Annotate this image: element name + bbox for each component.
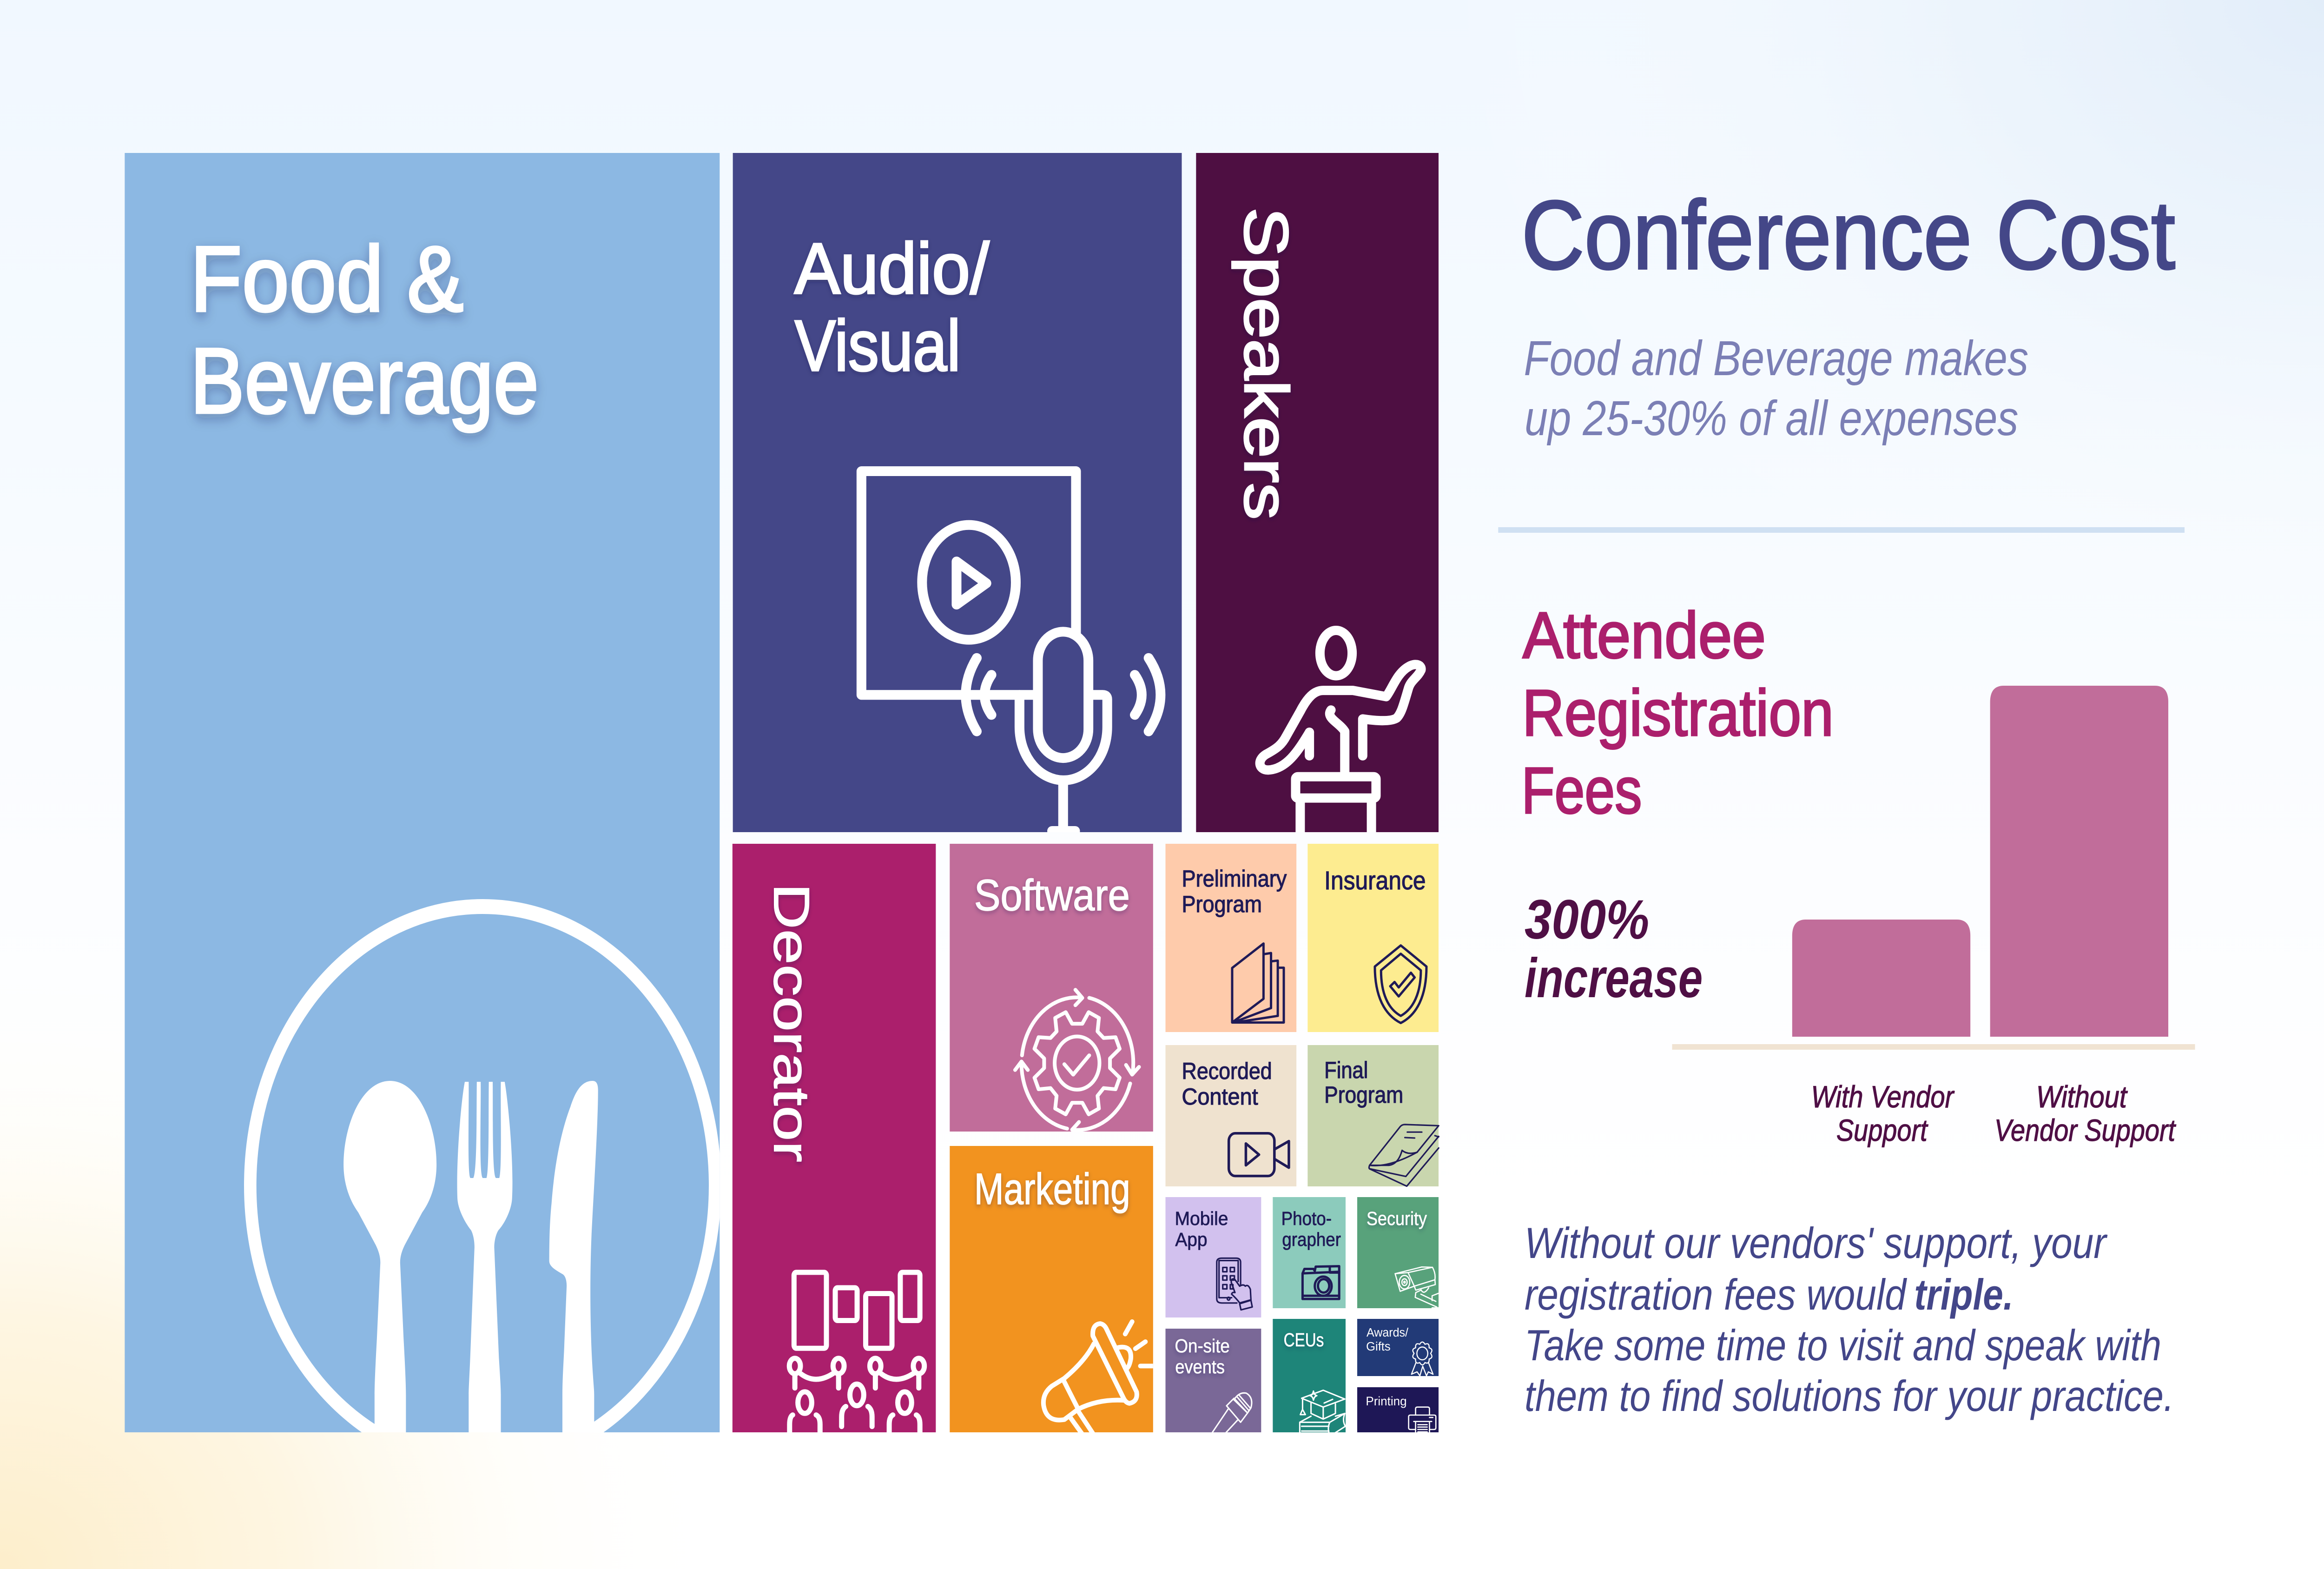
- icon: shield: [1375, 946, 1426, 1023]
- icon: speaker at a podium: [1260, 630, 1421, 842]
- icon: gear with check mark: [1015, 990, 1139, 1136]
- label: recorded content: [1182, 1058, 1272, 1110]
- subtitle: food and beverage share: Food and Beverage makes: [1524, 331, 2028, 386]
- icon: camera: [1302, 1266, 1339, 1299]
- panel: awards and gifts: [1357, 1319, 1439, 1376]
- panel: CEUs: [1273, 1319, 1346, 1435]
- panel: software: [950, 844, 1153, 1136]
- icon: plate with spoon, fork and knife: [250, 907, 715, 1464]
- icon: booklet: [1232, 944, 1284, 1022]
- label: on-site events: On-site: [1175, 1335, 1230, 1357]
- label: preliminary program: Preliminary: [1182, 865, 1287, 892]
- axis: [1672, 1044, 2195, 1050]
- label: photographer: grapher: [1282, 1229, 1341, 1250]
- panel: marketing: [950, 1146, 1154, 1438]
- label: awards and gifts: [1366, 1326, 1408, 1354]
- axis label: without vendor support: Vendor Support: [1994, 1113, 2176, 1147]
- axis label: with vendor support: [1811, 1079, 1955, 1147]
- axis label: with vendor support: With Vendor: [1811, 1079, 1955, 1114]
- panel: audio/visual: [733, 153, 1182, 832]
- icon: award rosette: [1412, 1342, 1433, 1376]
- label: insurance: Insurance: [1324, 866, 1426, 895]
- text block: vendor support message: [1525, 1219, 2174, 1421]
- axis label: without vendor support: [1994, 1079, 2176, 1147]
- icon: security camera: [1395, 1267, 1438, 1308]
- icon: printer: [1409, 1407, 1436, 1435]
- subtitle: food and beverage share: up 25-30% of all expenses: [1525, 391, 2019, 446]
- text block: vendor support message: registration fees would: [1525, 1271, 1908, 1319]
- heading: attendee registration fees: Fees: [1521, 754, 1642, 827]
- axis label: with vendor support: Support: [1836, 1113, 1928, 1147]
- label: preliminary program: Program: [1182, 891, 1262, 917]
- heading: audio/visual: [794, 229, 990, 386]
- label: CEUs: CEUs: [1284, 1329, 1324, 1351]
- heading: audio/visual: Visual: [795, 306, 961, 386]
- panel: food and beverage: [125, 153, 720, 1464]
- text block: vendor support message: Take some time to visit and speak with: [1525, 1321, 2161, 1370]
- bar: with vendor support: [1792, 920, 1970, 1037]
- bar chart: registration fees: [1672, 686, 2195, 1147]
- panel: security: [1357, 1197, 1439, 1308]
- panel: mobile app: [1166, 1197, 1261, 1317]
- panel: preliminary program: [1166, 844, 1296, 1032]
- label: recorded content: Content: [1182, 1083, 1258, 1110]
- icon: megaphone: [1043, 1322, 1154, 1438]
- panel: on-site events: [1166, 1329, 1261, 1435]
- heading: speakers: Speakers: [1231, 207, 1301, 520]
- heading: decorator: Decorator: [763, 883, 819, 1162]
- bar: without vendor support: [1990, 686, 2168, 1037]
- label: mobile app: App: [1175, 1229, 1208, 1250]
- label: final program: Program: [1324, 1081, 1403, 1108]
- label: photographer: [1281, 1208, 1341, 1250]
- panel: printing: [1357, 1387, 1439, 1435]
- heading: food and beverage: Food &: [190, 227, 464, 331]
- icon: video screen and microphone: [861, 471, 1161, 831]
- heading: food and beverage: [190, 227, 539, 433]
- panel: recorded content: [1166, 1045, 1296, 1186]
- heading: software: Software: [974, 870, 1130, 920]
- subtitle: food and beverage share: [1524, 331, 2028, 446]
- label: security: Security: [1367, 1208, 1427, 1229]
- divider: [1498, 527, 2185, 533]
- callout: 300% increase: 300%: [1525, 888, 1649, 951]
- heading: audio/visual: Audio/: [794, 229, 990, 309]
- label: mobile app: [1175, 1208, 1228, 1250]
- heading: attendee registration fees: Registration: [1522, 676, 1834, 749]
- axis label: without vendor support: Without: [2036, 1079, 2128, 1114]
- label: on-site events: [1175, 1335, 1230, 1377]
- heading: marketing: Marketing: [974, 1164, 1130, 1214]
- panel: photographer: [1273, 1197, 1346, 1308]
- heading: attendee registration fees: [1521, 599, 1834, 827]
- text block: vendor support message: Without our vendors' support, your: [1525, 1219, 2108, 1268]
- heading: attendee registration fees: Attendee: [1523, 599, 1766, 672]
- icon: folded program: [1369, 1125, 1439, 1186]
- callout: 300% increase: [1525, 888, 1703, 1009]
- label: awards and gifts: Awards/: [1367, 1326, 1408, 1340]
- label: preliminary program: [1182, 865, 1287, 917]
- label: on-site events: events: [1175, 1356, 1225, 1377]
- text block: vendor support message: them to find solutions for your practice.: [1525, 1372, 2174, 1421]
- text block: vendor support message: triple.: [1914, 1271, 2014, 1319]
- label: photographer: Photo-: [1281, 1208, 1332, 1229]
- panel: insurance: [1307, 844, 1439, 1032]
- heading: food and beverage: Beverage: [190, 329, 539, 433]
- icon: tablet and hand: [1217, 1258, 1252, 1310]
- icon: video camera: [1229, 1133, 1289, 1176]
- callout: 300% increase: increase: [1525, 947, 1703, 1009]
- label: final program: Final: [1324, 1057, 1368, 1083]
- panel: decorator: [733, 844, 936, 1438]
- label: recorded content: Recorded: [1182, 1058, 1272, 1084]
- label: mobile app: Mobile: [1175, 1208, 1228, 1229]
- icon: decor booth and people: [789, 1272, 924, 1438]
- icon: graduation cap and books: [1300, 1390, 1346, 1435]
- panel: speakers: [1196, 153, 1439, 842]
- label: final program: [1324, 1057, 1403, 1108]
- label: awards and gifts: Gifts: [1366, 1340, 1391, 1354]
- icon: microphone: [1211, 1393, 1252, 1435]
- label: printing: Printing: [1366, 1395, 1407, 1409]
- title: conference cost: Conference Cost: [1521, 180, 2175, 290]
- panel: final program: [1307, 1045, 1439, 1186]
